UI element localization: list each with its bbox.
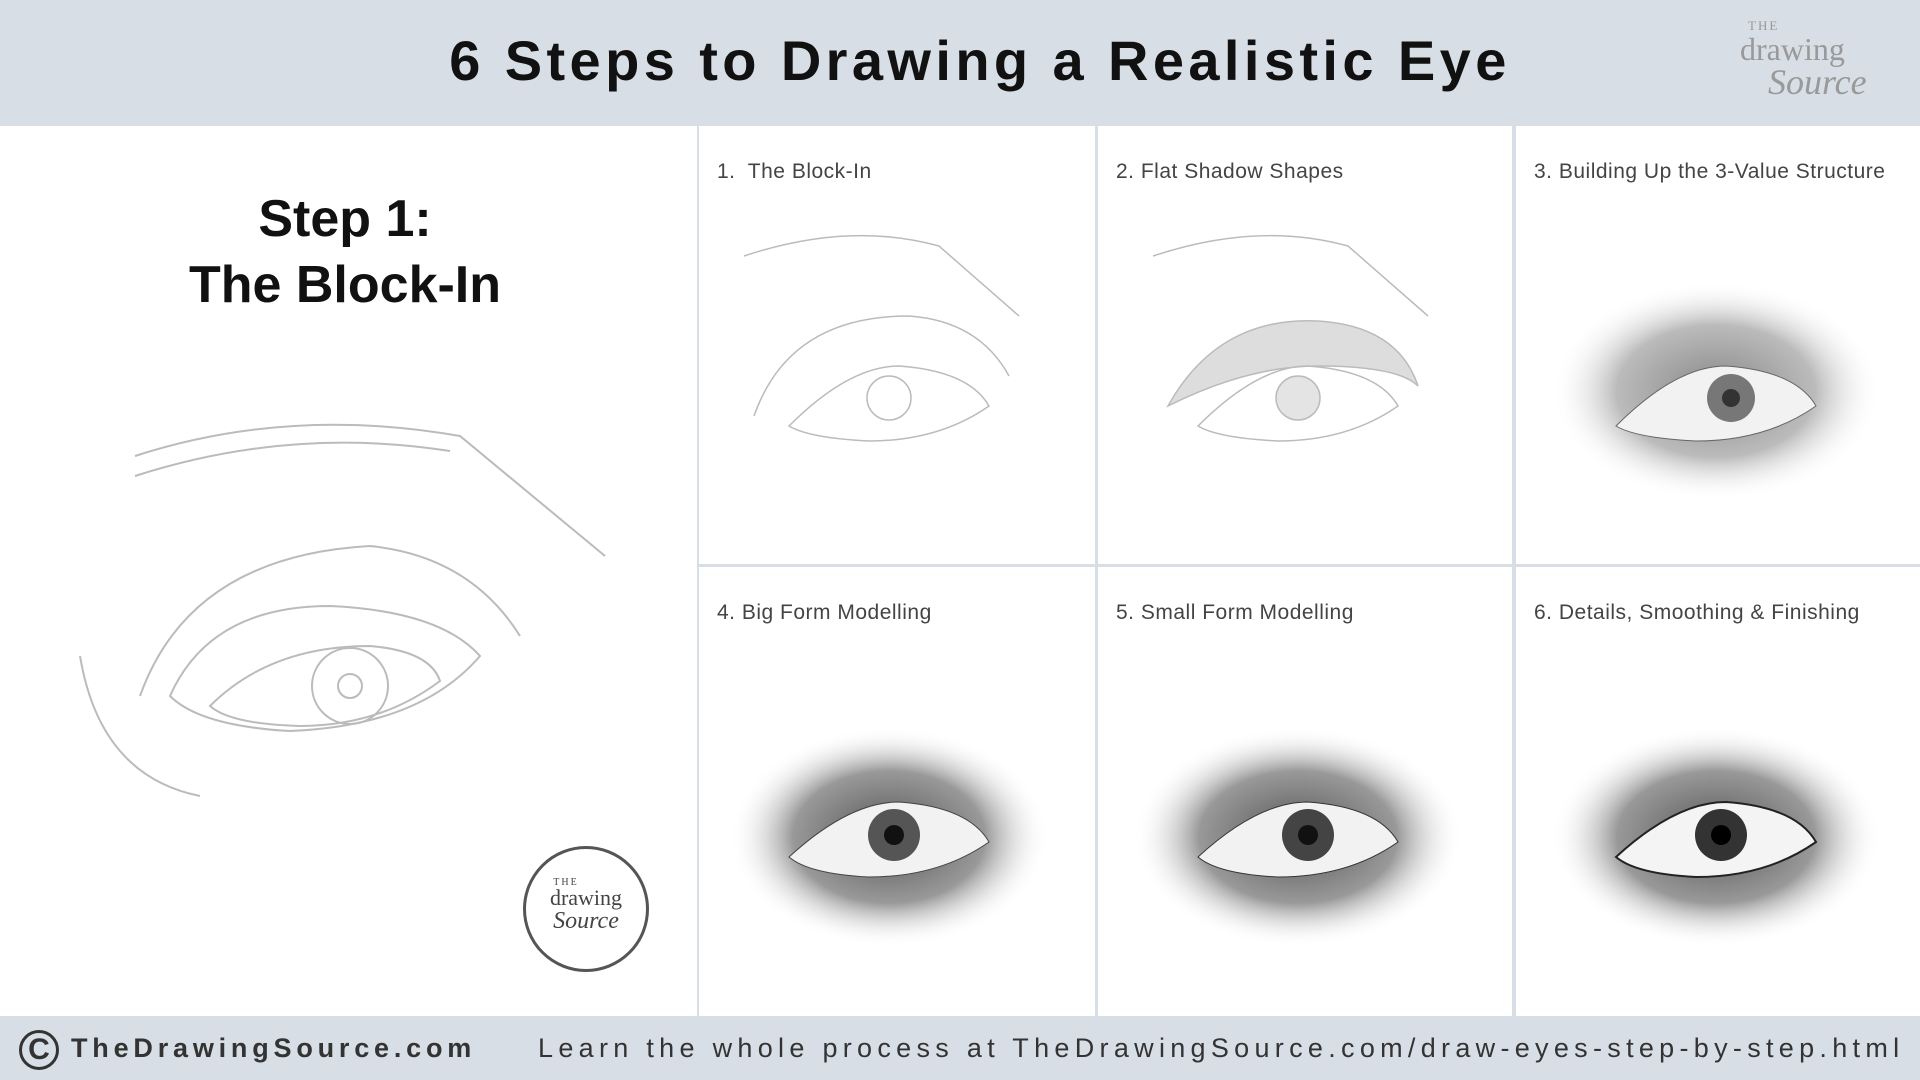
step 1 heading [189, 190, 501, 314]
logo: round stamp: Source [553, 908, 619, 934]
panel: step 5 small form modelling: 5. Small Form Modelling [1116, 601, 1354, 624]
panel: step 2 flat shadow shapes [1098, 126, 1512, 564]
logo: top right: Source [1768, 62, 1867, 102]
logo: round stamp: drawing [550, 885, 622, 910]
panel: step 3 building up [1516, 126, 1920, 564]
sketch eye large [79, 424, 606, 797]
footer site name: TheDrawingSource.com [71, 1033, 476, 1063]
step 1 heading: Step 1: [258, 190, 432, 248]
logo: top right: drawing [1740, 31, 1845, 67]
panel: step 2 flat shadow shapes: 2. Flat Shadow Shapes [1116, 160, 1344, 183]
panel: step 1 large [0, 126, 697, 1016]
panel: step 1 block-in: 1. The Block-In [717, 160, 872, 183]
panel: step 6 details: 6. Details, Smoothing & Finishing [1534, 601, 1860, 624]
step 1 heading: The Block-In [189, 256, 501, 314]
header bar [0, 0, 1920, 126]
panel: step 3 building up: 3. Building Up the 3-Value Structure [1534, 160, 1885, 183]
footer bar [0, 1016, 1920, 1080]
title: 6 Steps to Drawing a Realistic Eye [449, 29, 1511, 92]
panel: step 1 block-in [699, 126, 1095, 564]
panel: step 5 small form modelling [1098, 567, 1512, 1016]
panel: step 4 big form modelling: 4. Big Form Modelling [717, 601, 932, 624]
panel: step 6 details [1516, 567, 1920, 1016]
footer link text: Learn the whole process at TheDrawingSource.com/draw-eyes-step-by-step.html [538, 1033, 1904, 1063]
panel: step 4 big form modelling [699, 567, 1095, 1016]
icon: copyright: C [28, 1033, 50, 1066]
logo: round stamp: THE [553, 877, 579, 888]
logo: top right [1740, 18, 1867, 102]
logo: top right: THE [1748, 18, 1779, 33]
logo: round stamp [523, 846, 649, 972]
icon: copyright [19, 1030, 59, 1070]
